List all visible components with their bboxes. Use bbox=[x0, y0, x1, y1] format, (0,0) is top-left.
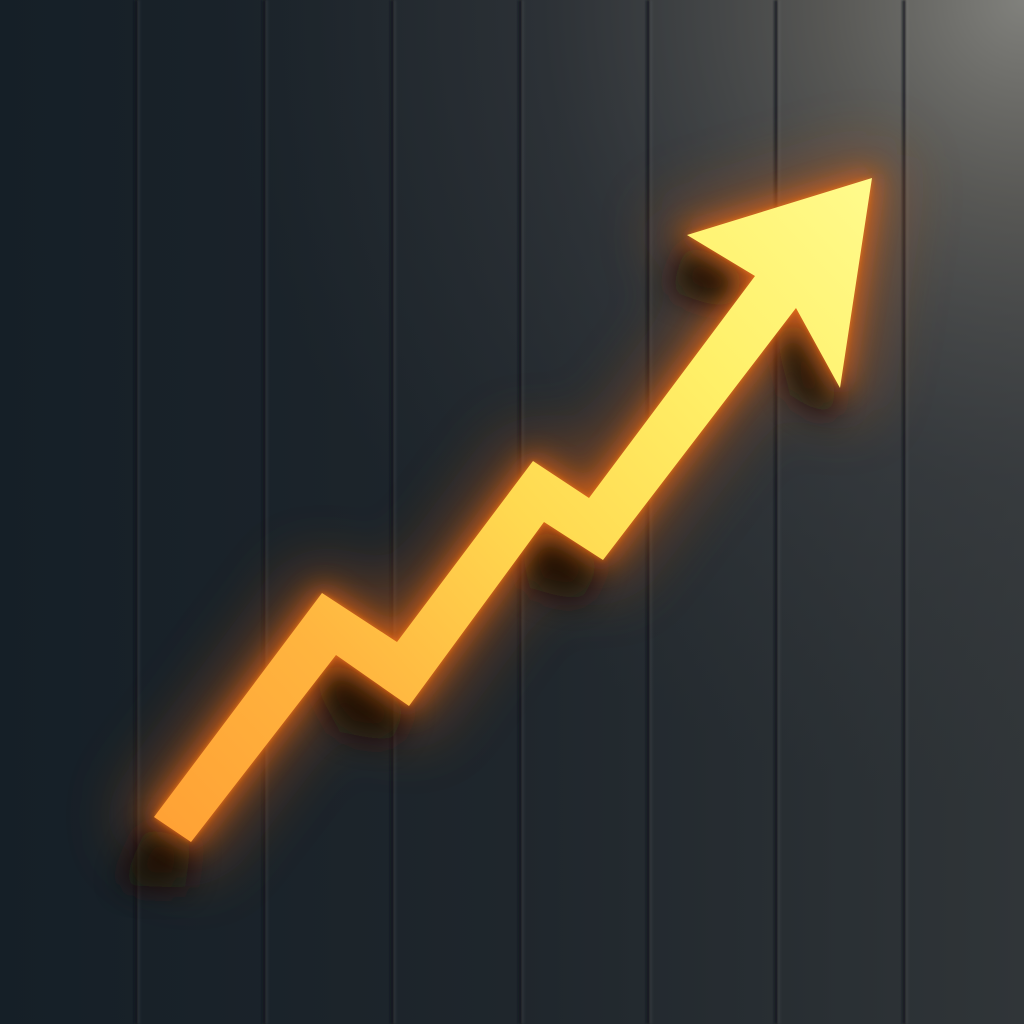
arrow body bbox=[154, 178, 872, 842]
arrow cast shadows bbox=[120, 240, 838, 888]
arrow inner glow bbox=[154, 178, 872, 842]
arrow outer glow bbox=[154, 178, 872, 842]
wide warm ambient glow bbox=[154, 178, 872, 842]
wall panel grooves bbox=[136, 0, 908, 1024]
